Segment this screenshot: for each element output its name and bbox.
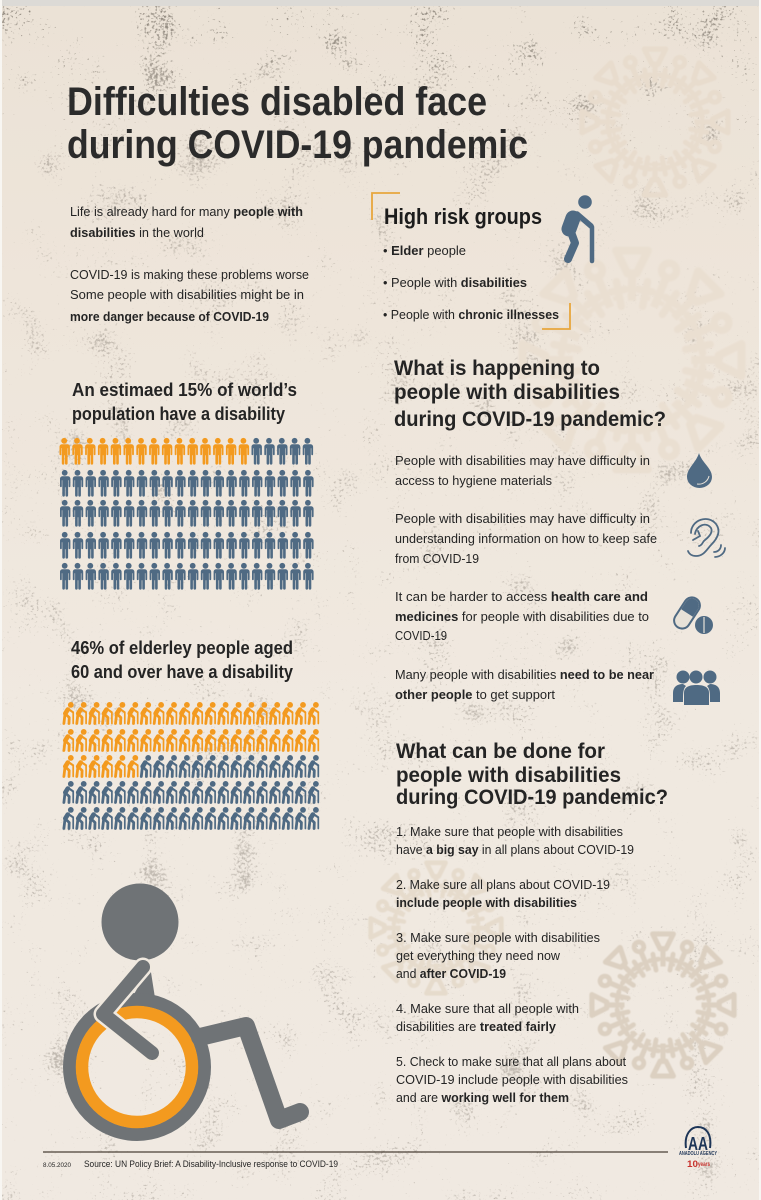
list: risk groups: • People with chronic illnesses [383, 307, 559, 322]
numbered list: recommendations: and are working well for them [396, 1090, 569, 1105]
heading: 46 percent statistic [71, 638, 293, 682]
numbered list: recommendations: 4. Make sure that all people with [396, 1001, 579, 1016]
icon: elderly person [568, 195, 592, 261]
logo: Anadolu Agency: 10 [687, 1159, 698, 1169]
heading: 15 percent statistic: population have a disability [72, 404, 285, 424]
panel: high risk groups [372, 193, 592, 329]
text: health care access: It can be harder to access health care and [395, 589, 648, 604]
date: 8.05.2020 [43, 1162, 71, 1169]
text: information difficulty: understanding information on how to keep safe [395, 531, 657, 546]
numbered list: recommendations: 5. Check to make sure that all plans about [396, 1054, 626, 1069]
numbered list: recommendations: get everything they need now [396, 948, 561, 963]
text: hygiene difficulty: People with disabilities may have difficulty in [395, 453, 650, 468]
wheelchair illustration [70, 884, 300, 1134]
text: information difficulty: People with disabilities may have difficulty in [395, 511, 650, 526]
intro text: COVID-19 is making these problems worse [70, 267, 309, 282]
list: risk groups: • People with disabilities [383, 275, 527, 290]
text: hygiene difficulty [395, 453, 650, 488]
decorative virus: lower right [592, 934, 734, 1076]
icon: group of people [673, 670, 720, 705]
pictogram: 46 of 100 elderly people [64, 702, 319, 828]
text: support needs: other people to get support [395, 687, 555, 702]
heading: what is happening [394, 357, 666, 431]
numbered list: recommendations: disabilities are treated fairly [396, 1019, 557, 1034]
heading: 46 percent statistic: 46% of elderley people aged [71, 638, 293, 658]
decorative virus: top right [582, 49, 728, 195]
list: risk groups [383, 243, 559, 322]
numbered list: recommendations: have a big say in all plans about COVID-19 [396, 842, 634, 857]
text: information difficulty: from COVID-19 [395, 551, 479, 566]
heading: 15 percent statistic [72, 380, 297, 424]
title [67, 80, 528, 167]
intro text: Some people with disabilities might be in [70, 287, 304, 302]
numbered list: recommendations: COVID-19 include people with disabilities [396, 1072, 628, 1087]
intro text: Life is already hard for many people with [70, 204, 303, 219]
pictogram: 15 of 100 people [60, 438, 314, 590]
logo: Anadolu Agency [679, 1127, 718, 1169]
text: information difficulty [395, 511, 657, 566]
text: support needs [395, 667, 654, 702]
heading: high risk groups: High risk groups [384, 204, 542, 229]
heading: what is happening: during COVID-19 pandemic? [394, 408, 666, 431]
logo: Anadolu Agency: ANADOLU AGENCY [679, 1151, 718, 1157]
source: Source: UN Policy Brief: A Disability-Inclusive response to COVID-19 [84, 1159, 338, 1170]
intro text: more danger because of COVID-19 [70, 309, 269, 324]
intro text: disabilities in the world [70, 225, 204, 240]
numbered list: recommendations: 3. Make sure people with disabilities [396, 930, 600, 945]
text: hygiene difficulty: access to hygiene materials [395, 473, 552, 488]
logo: Anadolu Agency: years [698, 1162, 711, 1168]
icon: pills [671, 594, 713, 634]
title: Difficulties disabled face [67, 80, 487, 124]
numbered list: recommendations [396, 824, 634, 1105]
text: health care access: COVID-19 [395, 628, 447, 643]
heading: what can be done: during COVID-19 pandemic? [396, 786, 668, 809]
decorative virus: lower centre [371, 863, 501, 993]
heading: 15 percent statistic: An estimaed 15% of world’s [72, 380, 297, 400]
list: risk groups: • Elder people [383, 243, 466, 258]
icon: water drop [687, 453, 712, 488]
heading: 46 percent statistic: 60 and over have a disability [71, 662, 293, 682]
decorative virus: middle right [523, 251, 741, 469]
heading: what can be done [396, 740, 668, 809]
heading: what can be done: What can be done for [396, 740, 605, 763]
intro text [70, 204, 309, 324]
text: support needs: Many people with disabilities need to be near [395, 667, 654, 682]
title: during COVID-19 pandemic [67, 123, 528, 167]
heading: what can be done: people with disabilities [396, 764, 621, 787]
footer [43, 1127, 718, 1170]
text: health care access [395, 589, 649, 643]
numbered list: recommendations: and after COVID-19 [396, 966, 506, 981]
icon: ear [688, 519, 725, 557]
logo: Anadolu Agency: AA [688, 1134, 708, 1154]
numbered list: recommendations: include people with disabilities [396, 895, 577, 910]
numbered list: recommendations: 2. Make sure all plans about COVID-19 [396, 877, 610, 892]
numbered list: recommendations: 1. Make sure that people with disabilities [396, 824, 623, 839]
heading: what is happening: people with disabilities [394, 381, 620, 404]
text: health care access: medicines for people with disabilities due to [395, 609, 649, 624]
heading: what is happening: What is happening to [394, 357, 600, 380]
